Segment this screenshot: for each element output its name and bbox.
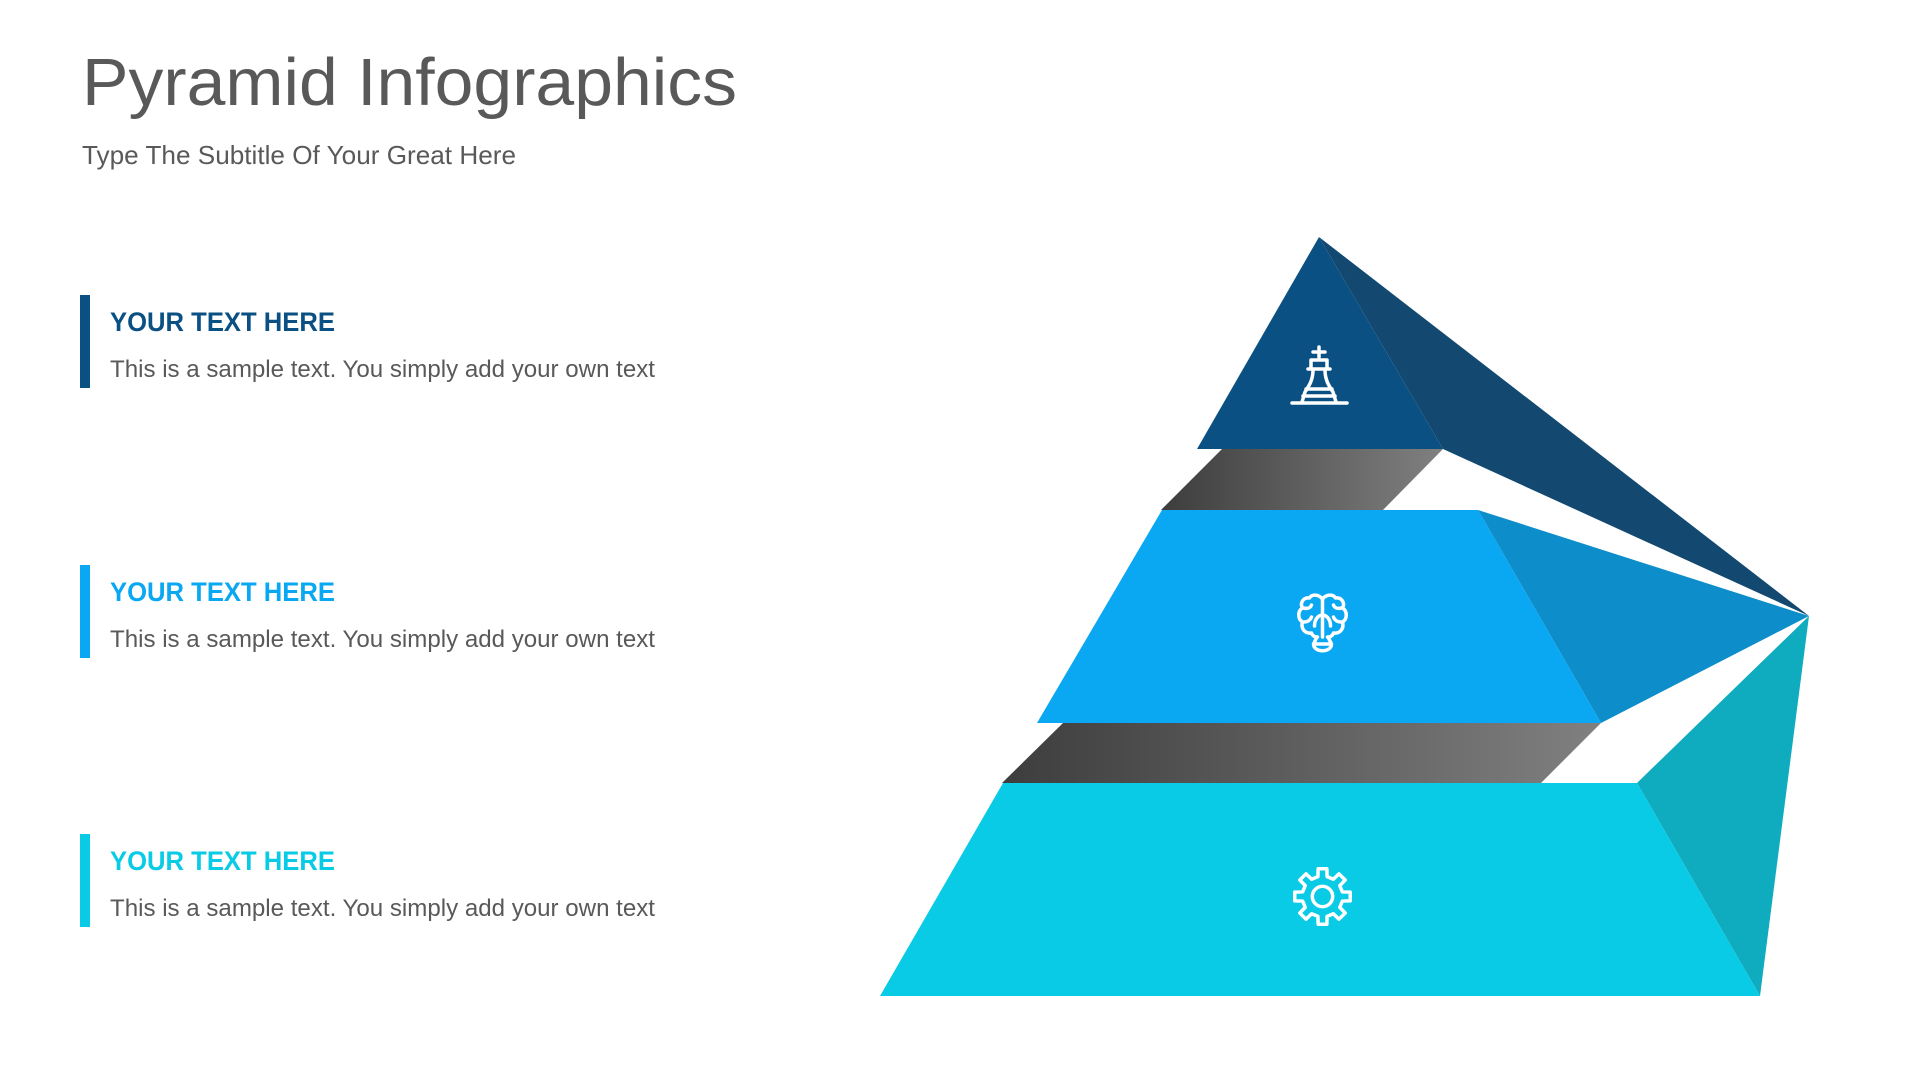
icon: gear (1295, 869, 1350, 924)
text block: item 3 (80, 834, 655, 927)
item 1 body: This is a sample text. You simply add your own text (110, 356, 655, 383)
pyramid chart (880, 237, 1809, 996)
tier 2 side face (1478, 510, 1809, 723)
tier 3 front face (880, 783, 1760, 996)
text block: item 1 (80, 295, 655, 388)
icon: brain bulb (1299, 595, 1346, 651)
accent bar 3 (80, 834, 90, 927)
connector: upper gray band (1161, 449, 1443, 510)
subtitle: Type The Subtitle Of Your Great Here (82, 140, 516, 170)
item 2 body: This is a sample text. You simply add your own text (110, 626, 655, 653)
tier 2 front face (1037, 510, 1601, 723)
tier 1 front face (1197, 237, 1443, 449)
connector: lower gray band (1002, 723, 1601, 783)
accent bar 1 (80, 295, 90, 388)
icon: chess king (1292, 347, 1347, 403)
item 3 heading: YOUR TEXT HERE (110, 846, 335, 876)
item 1 heading: YOUR TEXT HERE (110, 307, 335, 337)
tier 3 side face (1637, 616, 1809, 996)
title: Pyramid Infographics (82, 45, 737, 120)
accent bar 2 (80, 565, 90, 658)
item 2 heading: YOUR TEXT HERE (110, 577, 335, 607)
text block: item 2 (80, 565, 655, 658)
item 3 body: This is a sample text. You simply add your own text (110, 895, 655, 922)
tier 1 side face (1319, 237, 1809, 616)
